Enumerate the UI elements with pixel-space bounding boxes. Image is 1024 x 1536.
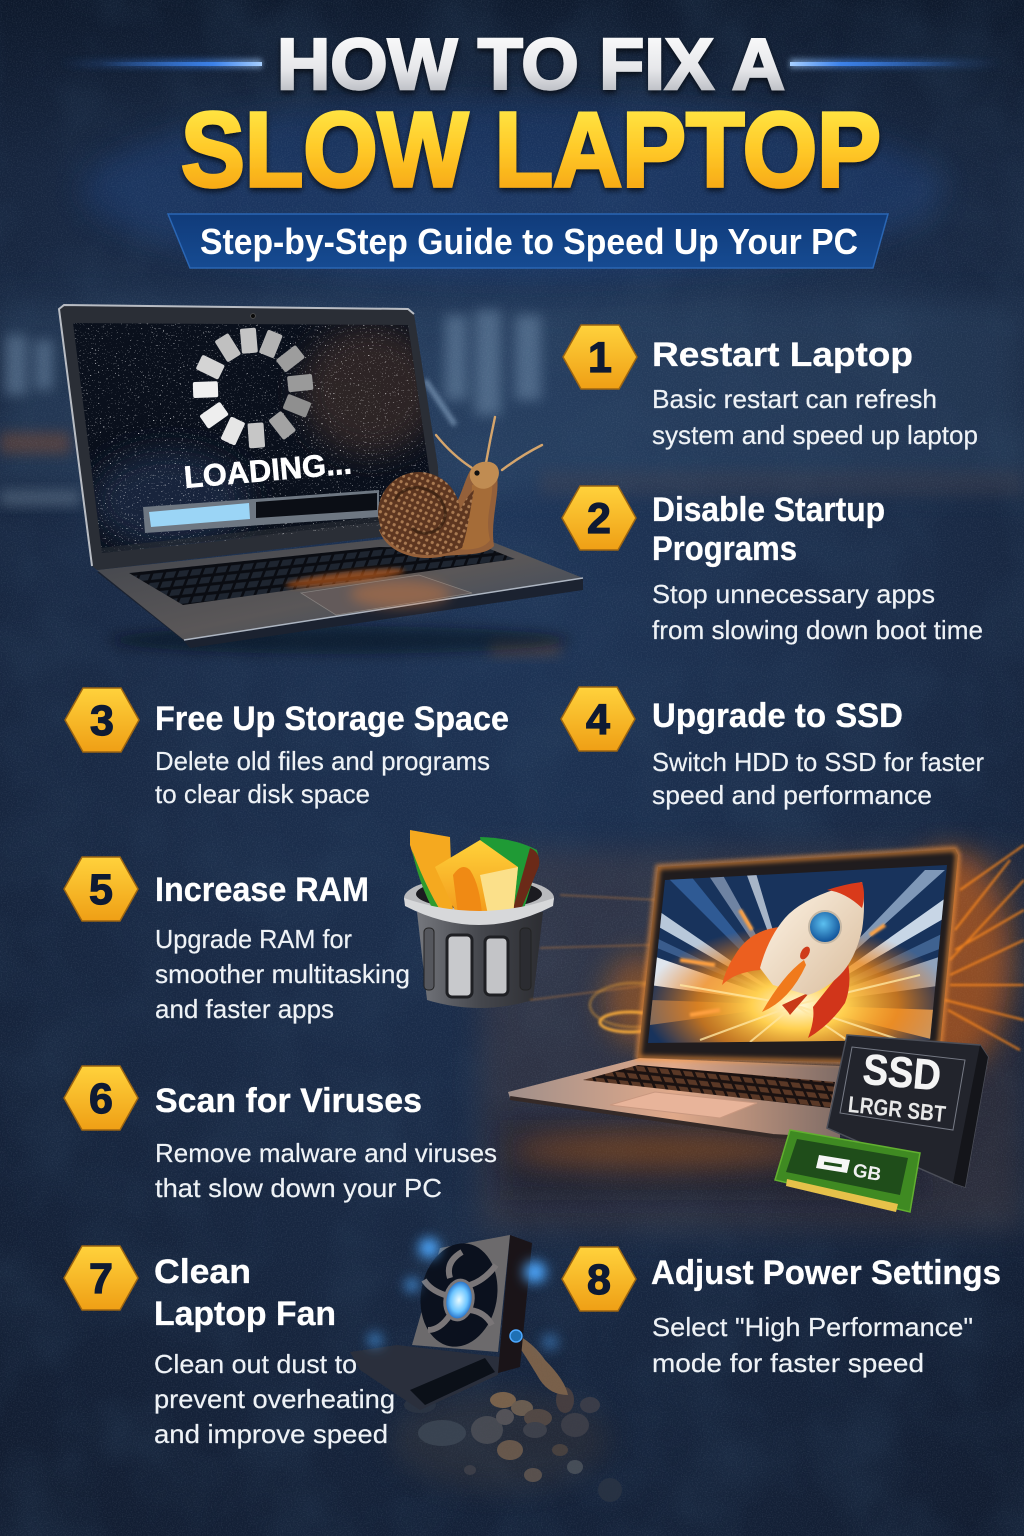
snail body — [379, 464, 498, 558]
title line 2: SLOW LAPTOP — [181, 91, 881, 209]
description 3: Delete old files and programs — [155, 746, 490, 776]
laptop base — [350, 1345, 500, 1410]
badge 6: 6 — [89, 1075, 113, 1123]
heading 2 — [652, 491, 885, 568]
description 5 — [155, 924, 410, 1024]
badge 7 — [64, 1246, 138, 1310]
heading 7: Laptop Fan — [154, 1295, 336, 1333]
energy flares — [530, 845, 1024, 1070]
badge 7: 7 — [89, 1255, 113, 1303]
subtitle banner: Step-by-Step Guide to Speed Up Your PC — [200, 221, 858, 262]
description 1 — [652, 384, 978, 450]
bin rim back — [404, 876, 554, 920]
illustration: dusty laptop fan — [350, 1235, 622, 1502]
bin rim front — [404, 898, 554, 925]
heading 4: Upgrade to SSD — [652, 697, 903, 735]
description 6: Remove malware and viruses — [155, 1138, 497, 1168]
folders in bin — [410, 830, 539, 915]
fan blades — [413, 1237, 505, 1353]
progress bar — [143, 490, 379, 533]
badge 4: 4 — [586, 696, 610, 744]
description 1: Basic restart can refresh — [652, 384, 937, 414]
loading spinner — [193, 328, 314, 448]
badge 5: 5 — [89, 866, 113, 914]
description 5: Upgrade RAM for — [155, 924, 352, 954]
blue sparks — [368, 1238, 558, 1350]
icon: trash bin with folders — [404, 830, 554, 1008]
description 2 — [652, 579, 983, 645]
laptop base — [97, 535, 583, 648]
fan housing — [498, 1235, 532, 1373]
heading 6: Scan for Viruses — [155, 1082, 422, 1120]
badge 8: 8 — [587, 1256, 611, 1304]
step 7 — [64, 1246, 395, 1449]
description 2: from slowing down boot time — [652, 615, 983, 645]
step 5 — [64, 857, 410, 1024]
rocket window — [809, 911, 841, 943]
illustration: fast laptop with rocket, SSD and RAM — [508, 845, 1024, 1212]
bin slots — [447, 935, 472, 997]
badge 1: 1 — [588, 334, 612, 382]
badge 6 — [64, 1066, 138, 1130]
SSD drive: SSD — [861, 1046, 943, 1100]
description 7 — [154, 1349, 395, 1449]
laptop lid — [59, 305, 440, 570]
badge 1 — [563, 325, 637, 389]
right glow line — [790, 59, 1002, 68]
webcam — [251, 314, 255, 318]
heading 7 — [154, 1253, 336, 1333]
keyboard — [583, 1065, 835, 1108]
description 8 — [652, 1312, 973, 1378]
rocket screen — [648, 865, 947, 1043]
description 2: Stop unnecessary apps — [652, 579, 935, 609]
step 3 — [65, 688, 509, 809]
heading 2: Disable Startup — [652, 491, 885, 529]
rocket — [722, 882, 864, 1038]
snail shell — [378, 472, 460, 554]
bin body — [417, 912, 543, 1008]
RAM stick: GB — [851, 1160, 883, 1186]
description 5: and faster apps — [155, 994, 334, 1024]
description 7: Clean out dust to — [154, 1349, 357, 1379]
rocket nose — [827, 882, 864, 908]
description 3: to clear disk space — [155, 779, 370, 809]
keyboard — [129, 547, 515, 605]
heading 2: Programs — [652, 530, 797, 568]
title line 1: HOW TO FIX A — [277, 25, 785, 105]
snail head — [470, 462, 499, 489]
touchpad — [610, 1092, 757, 1118]
description 3 — [155, 746, 490, 809]
touchpad — [301, 575, 472, 615]
loading label: LOADING... — [183, 445, 353, 495]
SSD drive — [827, 1035, 988, 1187]
fan hub — [442, 1278, 476, 1322]
step 4 — [561, 687, 984, 810]
description 1: system and speed up laptop — [652, 420, 978, 450]
snail — [378, 417, 542, 558]
illustration: slow laptop with snail — [59, 305, 583, 654]
dust rocks — [390, 1335, 622, 1502]
step 2 — [562, 486, 983, 645]
step 6 — [64, 1066, 497, 1203]
step 8 — [562, 1247, 1001, 1378]
description 8: Select "High Performance" — [652, 1312, 973, 1342]
description 4: Switch HDD to SSD for faster — [652, 747, 984, 777]
heading 7: Clean — [154, 1253, 251, 1291]
badge 3 — [65, 688, 139, 752]
badge 4 — [561, 687, 635, 751]
heading 8: Adjust Power Settings — [651, 1254, 1001, 1292]
badge 2 — [562, 486, 636, 550]
badge 5 — [64, 857, 138, 921]
heading 3: Free Up Storage Space — [155, 700, 509, 738]
left glow line — [60, 59, 262, 68]
description 8: mode for faster speed — [652, 1348, 924, 1378]
description 7: and improve speed — [154, 1419, 388, 1449]
badge 2: 2 — [587, 495, 611, 543]
badge 3: 3 — [90, 697, 114, 745]
heading 1: Restart Laptop — [652, 336, 913, 374]
laptop lid — [638, 849, 958, 1062]
SSD drive: LRGR SBT — [847, 1091, 947, 1127]
description 4 — [652, 747, 984, 810]
description 7: prevent overheating — [154, 1384, 395, 1414]
snail antennae — [436, 417, 542, 470]
title block — [60, 25, 1002, 268]
badge 8 — [562, 1247, 636, 1311]
description 6: that slow down your PC — [155, 1173, 442, 1203]
description 5: smoother multitasking — [155, 959, 410, 989]
description 4: speed and performance — [652, 780, 932, 810]
step 1 — [563, 325, 978, 450]
laptop screen — [70, 320, 440, 560]
laptop base — [508, 1058, 840, 1140]
heading 5: Increase RAM — [155, 871, 369, 909]
RAM stick — [775, 1130, 920, 1212]
description 6 — [155, 1138, 497, 1203]
